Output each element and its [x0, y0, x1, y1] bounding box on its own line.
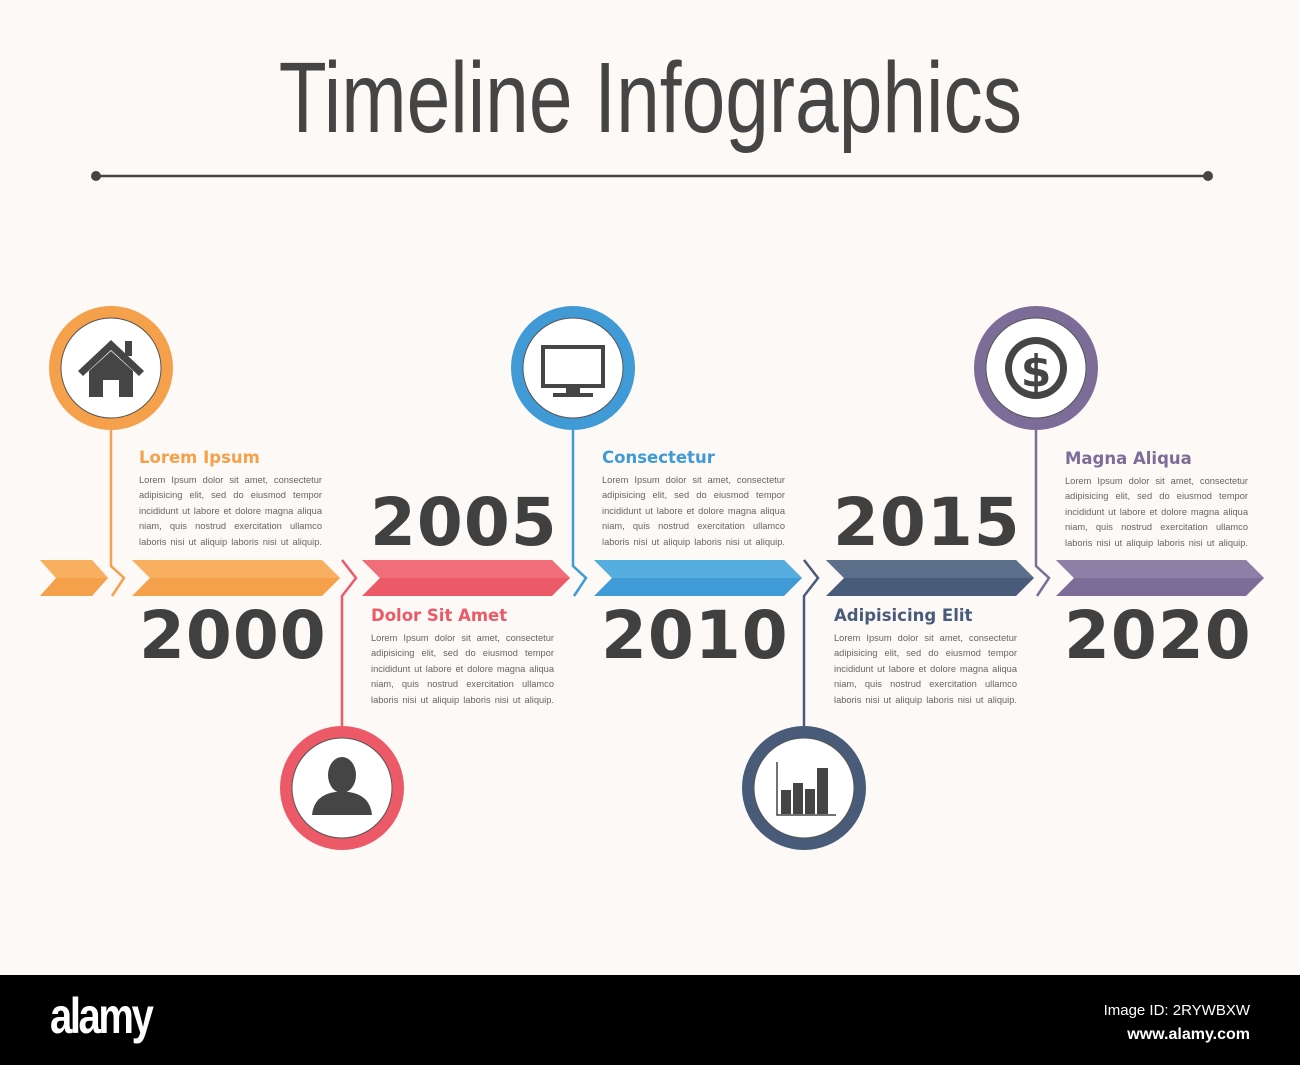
connector: red	[342, 560, 356, 726]
text: Adipisicing Elit	[834, 606, 972, 625]
year 2000: 2000	[139, 597, 327, 674]
footer id: www.alamy.com	[1127, 1026, 1250, 1043]
text block: Dolor Sit Amet	[371, 606, 554, 705]
connector: orange	[111, 430, 124, 596]
year 2010: 2010	[601, 597, 789, 674]
text block: Lorem Ipsum	[139, 448, 322, 547]
icon circle: chart	[748, 732, 860, 844]
year 2015: 2015	[833, 484, 1021, 561]
footer id: Image ID: 2RYWBXW	[1104, 1002, 1250, 1019]
text: Lorem Ipsum dolor sit amet, consectetur adipisicing elit, sed do eiusmod tempor incididunt ut labore et dolore magna aliqua niam, quis nostrud exercitation ullamco laboris nisi ut aliquip laboris nisi ut aliquip.	[139, 475, 322, 547]
year 2005: 2005	[370, 484, 558, 561]
text: Lorem Ipsum dolor sit amet, consectetur adipisicing elit, sed do eiusmod tempor incididunt ut labore et dolore magna aliqua niam, quis nostrud exercitation ullamco laboris nisi ut aliquip laboris nisi ut aliquip.	[602, 475, 785, 547]
title: Timeline Infographics	[278, 42, 1022, 154]
icon circle: person	[286, 732, 398, 844]
footer logo: alamy	[50, 988, 151, 1044]
footer id	[1104, 1002, 1250, 1043]
icon circle: house	[55, 312, 167, 424]
text: Magna Aliqua	[1065, 449, 1192, 468]
year 2020: 2020	[1064, 597, 1252, 674]
connector: navy	[804, 560, 818, 726]
footer bar	[0, 975, 1300, 1065]
text: Lorem Ipsum dolor sit amet, consectetur adipisicing elit, sed do eiusmod tempor incididunt ut labore et dolore magna aliqua niam, quis nostrud exercitation ullamco laboris nisi ut aliquip laboris nisi ut aliquip.	[834, 633, 1017, 705]
text: Lorem Ipsum	[139, 448, 260, 467]
text block: Adipisicing Elit	[834, 606, 1018, 705]
text: Lorem Ipsum dolor sit amet, consectetur adipisicing elit, sed do eiusmod tempor incididunt ut labore et dolore magna aliqua niam, quis nostrud exercitation ullamco laboris nisi ut aliquip laboris nisi ut aliquip.	[371, 633, 554, 705]
text block: Magna Aliqua	[1065, 449, 1248, 548]
icon circle: dollar	[980, 312, 1092, 424]
text: Lorem Ipsum dolor sit amet, consectetur adipisicing elit, sed do eiusmod tempor incididunt ut labore et dolore magna aliqua niam, quis nostrud exercitation ullamco laboris nisi ut aliquip laboris nisi ut aliquip.	[1065, 476, 1248, 548]
connector: blue	[573, 430, 586, 596]
icon circle: monitor	[517, 312, 629, 424]
text: Consectetur	[602, 448, 715, 467]
icon circle: dollar: $	[1021, 346, 1051, 397]
timeline arrows	[40, 560, 1264, 596]
text: Dolor Sit Amet	[371, 606, 507, 625]
text block: Consectetur	[602, 448, 786, 547]
connector: purple	[1036, 430, 1049, 596]
